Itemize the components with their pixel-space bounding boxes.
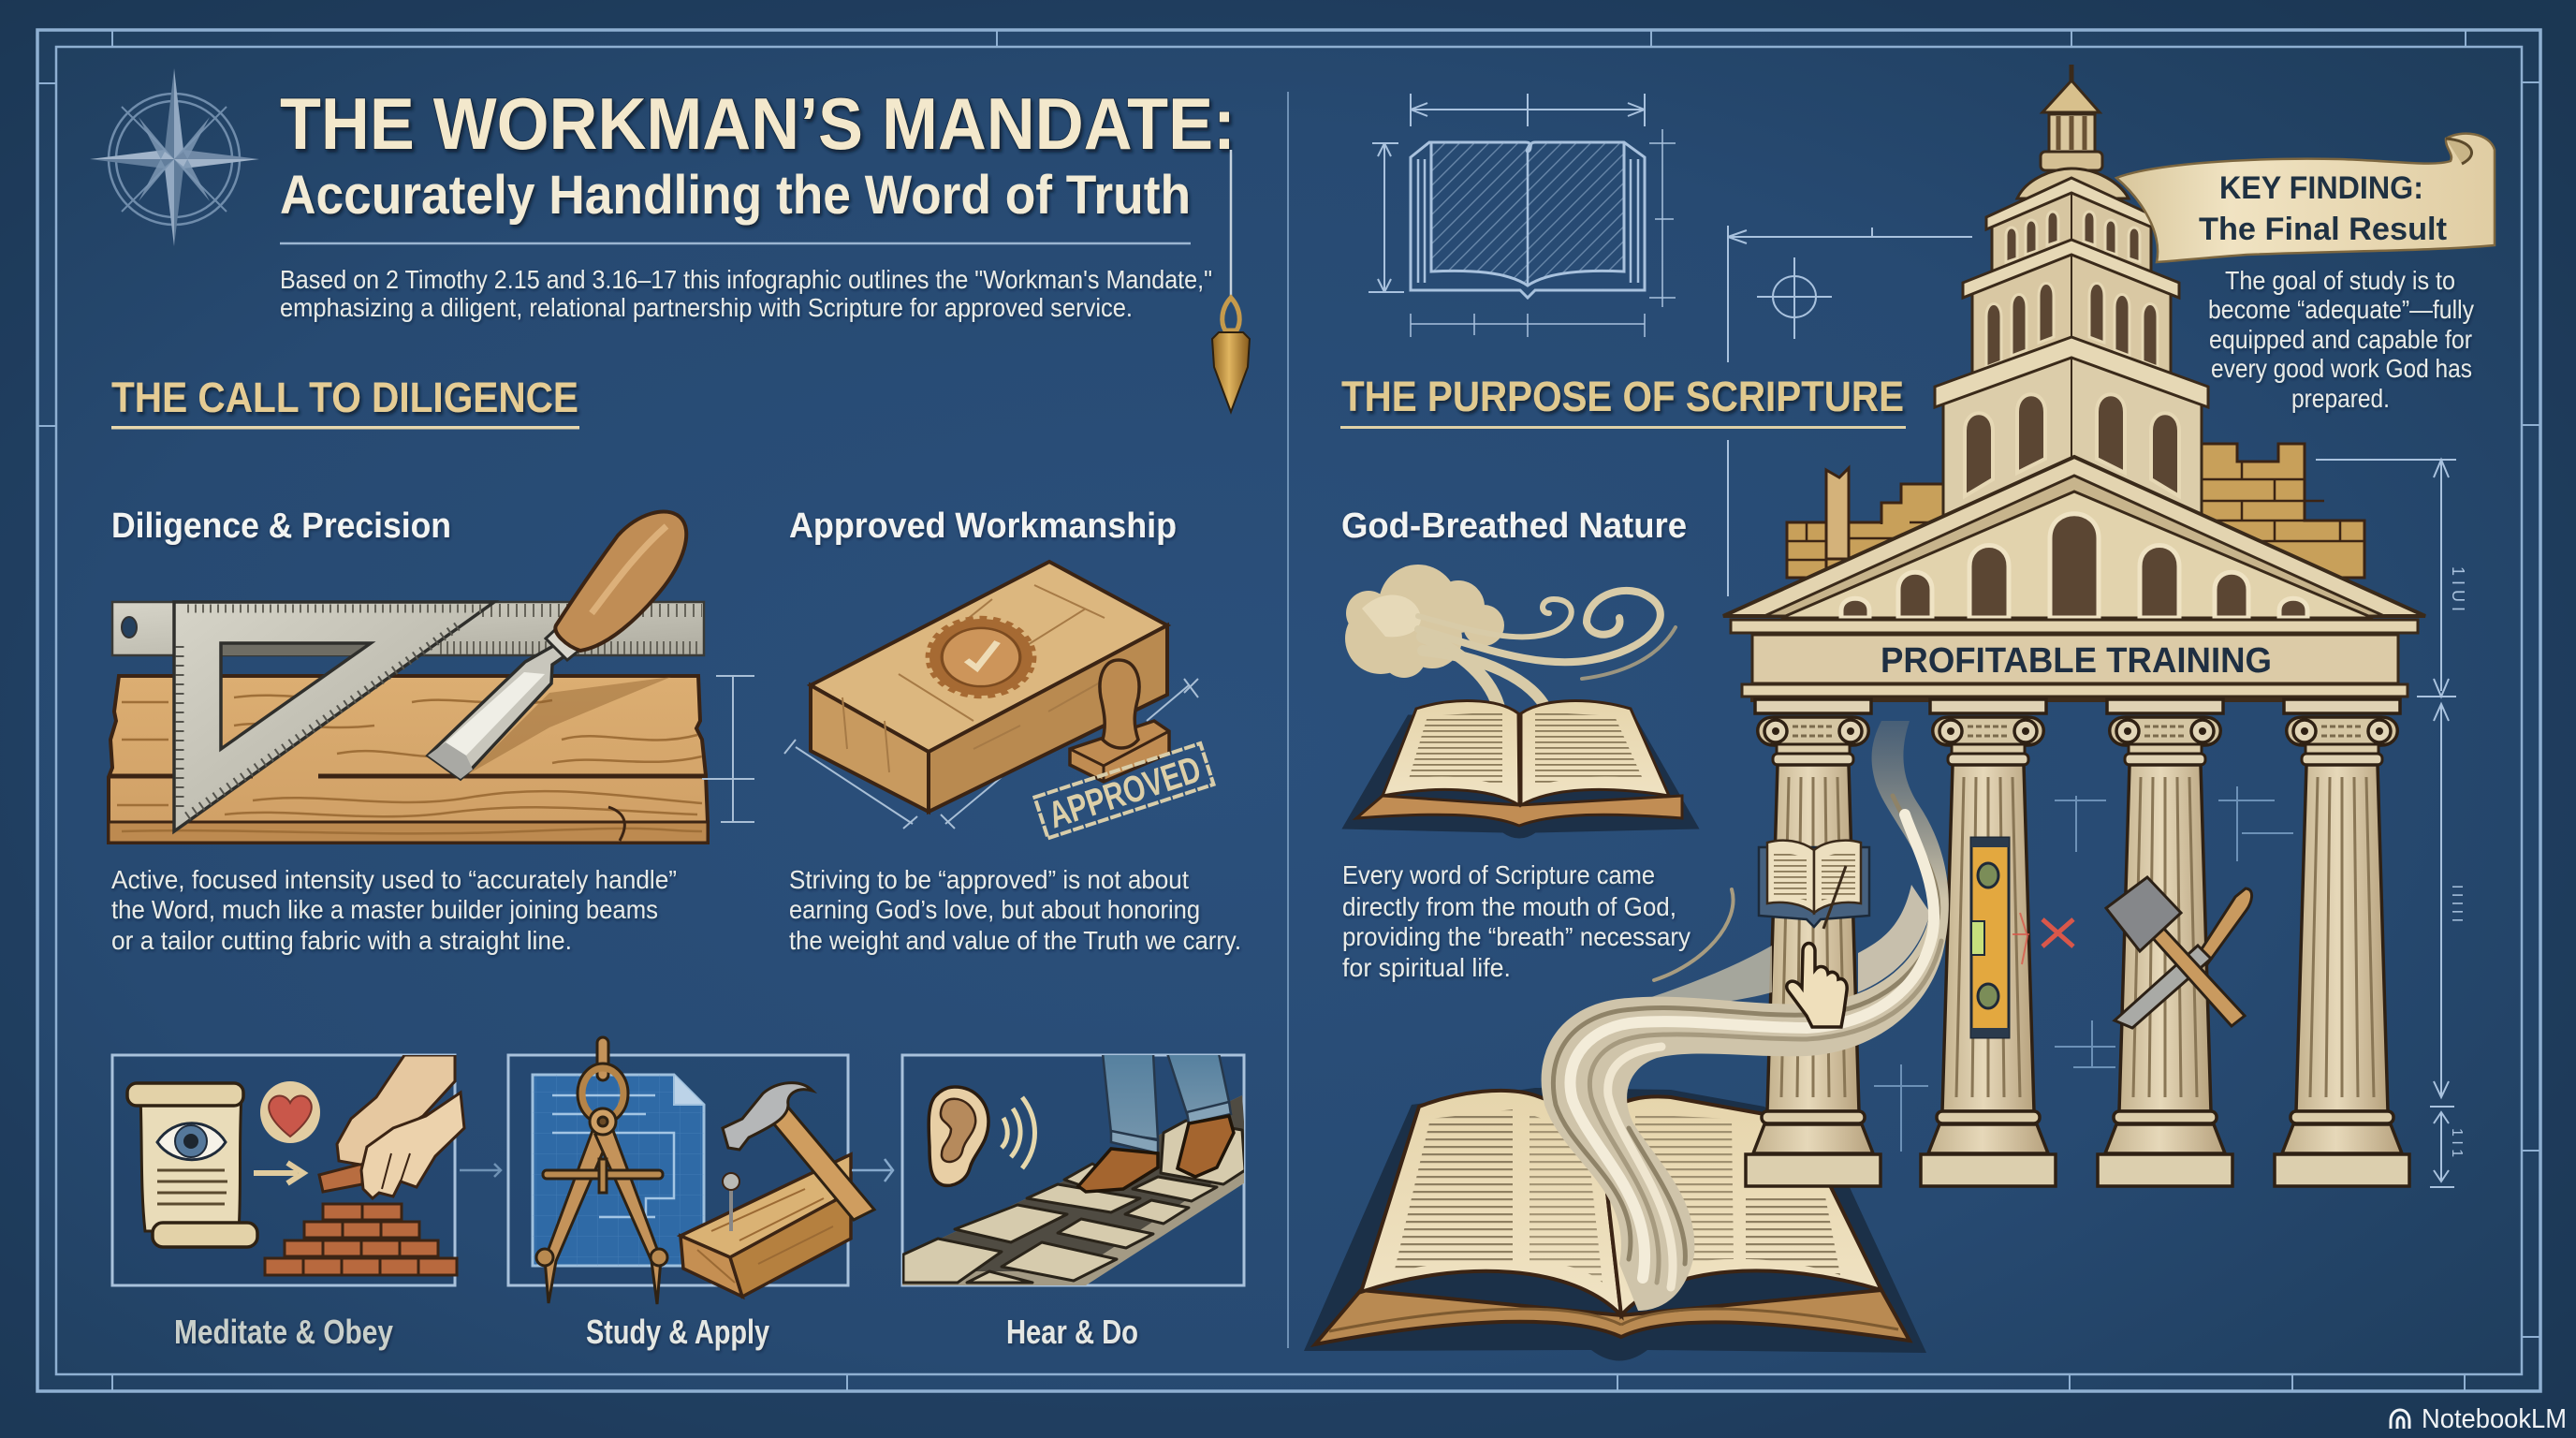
text: diligence and precision: or a tailor cutting fabric with a straight line.	[111, 926, 572, 955]
text: diligence and precision: Active, focused intensity used to “accurately handle”	[111, 865, 677, 894]
text: god-breathed nature	[1342, 860, 1690, 982]
blueprint crosshair and dimension lines	[1728, 226, 1972, 596]
panel: hear and do	[902, 1053, 1247, 1285]
subtitle: Accurately Handling the Word of Truth	[280, 165, 1191, 226]
text: key finding	[2208, 266, 2474, 413]
icon: hands placing brick	[319, 1055, 464, 1198]
title: THE WORKMAN’S MANDATE:	[280, 82, 1236, 165]
blueprint marks between columns	[1874, 786, 2293, 1152]
icon: small book on column	[1759, 841, 1869, 929]
heading: approved workmanship: Approved Workmanship	[789, 506, 1177, 546]
icon: drafting compass	[536, 1037, 667, 1304]
arrow: meditate to study	[460, 1164, 501, 1177]
text: diligence and precision: the Word, much like a master builder joining beams	[111, 895, 658, 924]
building: columns	[1746, 699, 2409, 1186]
building: entablature with label	[1731, 620, 2418, 702]
icon: plumb bob	[1212, 150, 1250, 412]
panel: meditate and obey	[112, 1055, 464, 1285]
icon: pointing hand	[1787, 944, 1847, 1027]
center divider	[1287, 92, 1289, 1348]
text: approved workmanship: Striving to be “approved” is not about	[789, 865, 1189, 894]
big open book	[1304, 1088, 1926, 1361]
arrow: study to hear	[852, 1159, 893, 1181]
text: key finding: prepared.	[2291, 384, 2390, 413]
text: god-breathed nature: directly from the mouth of God,	[1342, 892, 1676, 921]
label: meditate and obey: Meditate & Obey	[174, 1313, 393, 1351]
icon: blueprint sheet	[533, 1075, 704, 1266]
label: hear and do: Hear & Do	[1006, 1313, 1138, 1351]
text: diligence and precision	[111, 865, 677, 955]
icon: scroll with eye	[127, 1083, 257, 1247]
illustration: approved wood block and stamp: APPROVED	[1044, 749, 1206, 836]
blueprint dimension lines at right: 1 I 1	[2449, 1128, 2465, 1157]
icon: heart	[260, 1081, 320, 1143]
heading: the call to diligence: THE CALL TO DILIGENCE	[111, 374, 578, 421]
icon: brick pyramid	[265, 1204, 457, 1275]
intro text: Based on 2 Timothy 2.15 and 3.16–17 this infographic outlines the "Workman's Mandate,"	[280, 265, 1212, 294]
text: approved workmanship	[789, 865, 1241, 955]
building: pediment	[1723, 457, 2425, 618]
watermark: NotebookLM: NotebookLM	[2422, 1404, 2567, 1434]
heading: god-breathed nature: God-Breathed Nature	[1341, 506, 1687, 546]
intro text: emphasizing a diligent, relational partnership with Scripture for approved service.	[280, 293, 1133, 322]
text: key finding: equipped and capable for	[2209, 325, 2472, 354]
breath swirl rising from book	[1542, 721, 1949, 1311]
icon: crossed mallet and chisel	[2106, 877, 2252, 1028]
text: god-breathed nature: Every word of Scripture came	[1342, 860, 1655, 889]
text: god-breathed nature: providing the “breath” necessary	[1342, 922, 1690, 951]
blueprint dimension lines at right	[2316, 460, 2467, 1187]
banner: key finding: The Final Result	[2199, 212, 2447, 247]
illustration: plank, square and chisel	[109, 511, 754, 843]
banner: key finding: KEY FINDING:	[2219, 170, 2423, 206]
heading: diligence and precision: Diligence & Precision	[111, 506, 451, 546]
illustration: approved wood block and stamp	[784, 562, 1214, 839]
intro text	[280, 265, 1212, 322]
blueprint dimension lines at right: 1 I U I	[2449, 566, 2467, 611]
blueprint dimension lines at right: I I I I I	[2449, 885, 2465, 922]
building: bricks behind the temple	[1787, 444, 2364, 580]
panel: study and apply	[508, 1037, 874, 1304]
icon: compass rose	[90, 68, 259, 246]
text: approved workmanship: earning God’s love, but about honoring	[789, 895, 1200, 924]
text: key finding: every good work God has	[2211, 354, 2472, 383]
text: approved workmanship: the weight and value of the Truth we carry.	[789, 926, 1241, 955]
icon: red x mark	[2012, 913, 2073, 964]
illustration: stone path and feet	[902, 1053, 1247, 1285]
label: study and apply: Study & Apply	[586, 1313, 769, 1351]
icon: spirit level	[1971, 838, 2009, 1037]
illustration: cloud breathing onto open book	[1344, 565, 1697, 837]
arrow	[254, 1163, 303, 1183]
text: key finding: The goal of study is to	[2225, 266, 2455, 295]
text: key finding: become “adequate”—fully	[2208, 295, 2474, 324]
icon: hammer	[723, 1083, 874, 1220]
blueprint sketch: open book	[1368, 94, 1676, 337]
heading: the purpose of scripture: THE PURPOSE OF SCRIPTURE	[1341, 373, 1904, 420]
text: god-breathed nature: for spiritual life.	[1342, 953, 1511, 982]
building: tower	[1935, 65, 2208, 618]
icon: ear and sound	[929, 1087, 1035, 1185]
building: entablature with label: PROFITABLE TRAINING	[1881, 641, 2272, 681]
icon: wood beam with nail	[681, 1154, 851, 1297]
banner: key finding	[2116, 134, 2495, 262]
title rule	[280, 242, 1191, 244]
